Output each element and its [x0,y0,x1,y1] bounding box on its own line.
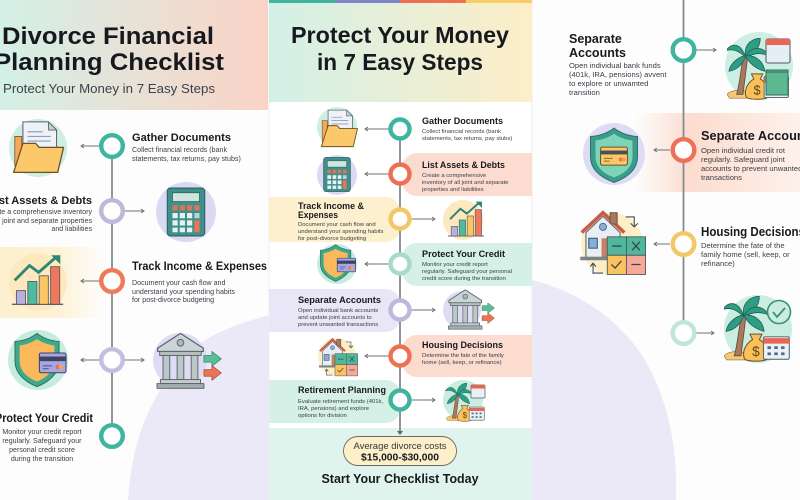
text: track income: understand your spending habits [298,229,384,235]
call to action: Start Your Checklist Today [322,471,479,486]
text: separate accounts: Open individual bank accounts [298,308,378,314]
text: track income: Document your cash flow and [132,279,226,287]
text: housing decisions: home (sell, keep, or refinance) [422,360,502,366]
right timeline [654,0,716,344]
text: retirement planning: options for division [298,413,347,419]
footer band [269,428,532,500]
text: list assets: List Assets & Debts [422,160,505,170]
icon: shield and card [8,330,68,390]
text: separate accounts: and update joint accounts to [298,315,372,321]
text: track income: for post-divorce budgeting [132,296,214,304]
text: track income: Expenses [298,210,338,220]
text: retirement planning: Retirement Planning [298,385,386,395]
text: separate accounts (credit) [701,128,800,182]
center title: in 7 Easy Steps [317,49,483,75]
text: gather documents [132,132,241,163]
text: list assets: and liabilities [51,225,92,233]
left title: Planning Checklist [0,49,224,76]
text: track income: Document your cash flow and [298,222,376,228]
left timeline [81,135,144,447]
icon: house with decision grid [318,338,358,376]
center header band [269,3,532,102]
text: protect credit [422,249,512,282]
text: retirement planning [298,385,386,419]
text: retirement planning: Evaluate retirement funds (401k, [298,399,383,405]
callout: average cost: Average divorce costs [354,441,447,451]
text: retirement planning: IRA, pensions) and explore [298,406,370,412]
text: separate accounts: Open individual bank funds [569,61,661,70]
center timeline [365,120,435,435]
icon: teal shield with card [583,123,645,185]
icon: bank [443,290,495,329]
text: protect credit: regularly. Safeguard your personal [422,269,512,275]
text: housing decisions: Housing Decisions [422,340,503,350]
text: track income: for post-divorce budgeting [298,236,366,242]
text: gather documents: Gather Documents [422,116,503,126]
text: separate accounts: transition [569,88,600,97]
callout: average cost: $15,000-$30,000 [361,452,440,464]
text: gather documents: statements, tax returns, pay stubs) [132,155,241,163]
text: track income [298,201,384,242]
text: protect credit: Monitor your credit report [422,262,488,268]
text: protect credit: personal credit score [9,446,75,454]
left title: Divorce Financial [2,23,214,50]
text: separate accounts (credit): accounts to prevent unwanted [701,164,800,173]
icon: palm tree with check [723,295,792,363]
text: list assets: properties and liabilities [422,187,484,193]
text: gather documents: Collect financial records (bank [132,146,227,154]
center title: Protect Your Money [291,22,509,48]
text: housing decisions [701,224,800,268]
text: separate accounts: (401k, IRA, pensions) avvent [569,70,667,79]
text: separate accounts (credit): Open individual credit rot [701,146,786,155]
icon: bank [153,333,221,388]
text: housing decisions: family home (sell, keep, or [701,250,790,259]
icon: house with decision grid [580,213,646,275]
text: gather documents: Collect financial records (bank [422,129,501,135]
left header band [0,0,268,110]
text: gather documents: statements, tax returns, pay stubs) [422,136,512,142]
panel: right checklist [569,0,800,363]
panel: left checklist [0,0,268,463]
text: track income [132,261,267,304]
yellow band behind chart [0,247,105,318]
text: gather documents: Gather Documents [132,132,231,144]
text: separate accounts (credit): regularly. Safeguard joint [701,155,786,164]
text: separate accounts: to explore or unwamted [569,79,648,88]
panel: center checklist [269,0,532,500]
text: separate accounts: Separate [569,32,622,46]
text: protect credit: Monitor your credit report [2,428,82,436]
text: separate accounts: prevent unwanted transactions [298,322,378,328]
text: track income: understand your spending habits [132,288,235,296]
text: track income: Track Income & Expenses [132,261,267,273]
icon: calculator [156,182,216,242]
text: separate accounts [298,295,381,328]
icon: folder [317,107,357,147]
text: list assets: Create a comprehensive [422,173,487,179]
text: protect credit: during the transition [11,455,73,463]
icon: shield and card [317,244,357,284]
icon: folder [9,119,67,177]
icon: growth chart [443,200,484,240]
icon: growth chart [9,253,67,311]
text: list assets: inventory of all joint and separate [422,180,509,186]
text: protect credit: credit score during the transition [422,276,506,282]
colored top bar [269,0,532,3]
coral band [635,113,800,192]
icon: calculator [317,155,357,195]
text: separate accounts: Accounts [569,46,626,60]
text: housing decisions: refinance) [701,259,735,268]
text: housing decisions [422,340,504,366]
text: separate accounts [569,32,667,97]
text: protect credit: regularly. Safeguard your [2,437,82,445]
text: gather documents [422,116,512,142]
callout: average cost [344,436,456,466]
left title [0,23,224,76]
left subtitle: Protect Your Money in 7 Easy Steps [3,81,216,96]
lavender background blob [128,280,676,500]
step bands [269,153,532,423]
text: protect credit [0,413,93,463]
icon: palm tree with money [725,32,793,100]
text: separate accounts: Separate Accounts [298,295,381,305]
text: list assets [0,195,92,233]
text: separate accounts (credit): transactions [701,173,742,182]
center title [291,22,509,75]
text: protect credit: Protect Your Credit [422,249,505,259]
icon: palm tree retirement [443,380,485,421]
text: housing decisions: Determine the fate of the family [422,353,504,359]
text: housing decisions: Determine the fate of the [701,241,785,250]
text: list assets [422,160,509,193]
text: track income: Track Income & [298,201,365,211]
